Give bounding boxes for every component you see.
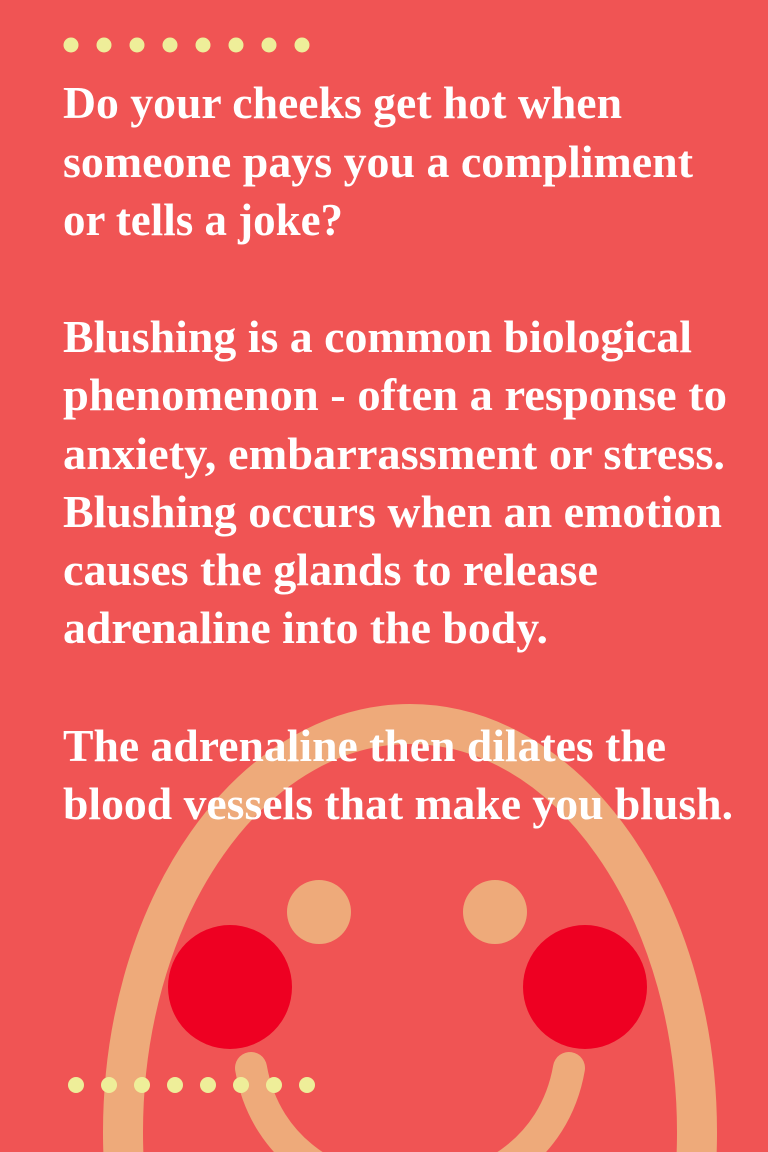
right eye — [463, 880, 527, 944]
text: conclusion paragraph — [63, 721, 733, 829]
text: explanation paragraph: phenomenon - often a response to — [63, 370, 727, 420]
text: conclusion paragraph: blood vessels that make you blush. — [63, 779, 733, 829]
text: explanation paragraph: adrenaline into the body. — [63, 603, 548, 653]
top dots — [64, 38, 310, 52]
text: conclusion paragraph: The adrenaline then dilates the — [63, 721, 666, 771]
right cheek — [523, 925, 647, 1049]
text: explanation paragraph: anxiety, embarrassment or stress. — [63, 429, 725, 479]
text: intro question — [63, 78, 693, 245]
bottom dots — [68, 1077, 315, 1093]
mouth — [251, 1068, 569, 1152]
text: explanation paragraph: Blushing is a common biological — [63, 312, 692, 362]
left cheek — [168, 925, 292, 1049]
face outline ring — [123, 724, 697, 1152]
text: explanation paragraph: Blushing occurs when an emotion — [63, 487, 722, 537]
text: explanation paragraph — [63, 312, 727, 653]
text: intro question: someone pays you a compliment — [63, 137, 693, 187]
text: intro question: or tells a joke? — [63, 195, 343, 245]
left eye — [287, 880, 351, 944]
icon: smiley face — [123, 724, 697, 1152]
text: intro question: Do your cheeks get hot when — [63, 78, 622, 128]
text: explanation paragraph: causes the glands to release — [63, 545, 598, 595]
